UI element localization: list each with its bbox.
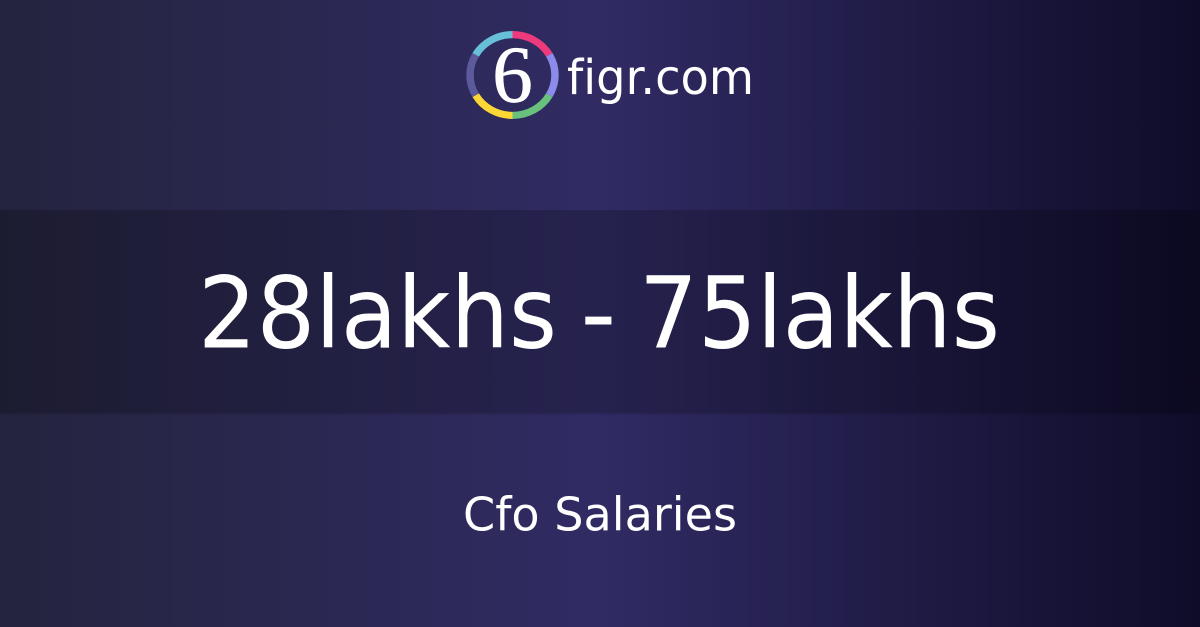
logo wordmark: figr.com <box>567 50 754 106</box>
subtitle: Cfo Salaries <box>463 488 737 542</box>
salary range headline: 75lakhs <box>639 256 1000 372</box>
icon: segmented ring <box>470 35 555 115</box>
band fill <box>0 210 1200 413</box>
salary range headline: 28lakhs <box>198 256 557 372</box>
icon: numeral six: 6 <box>492 30 533 120</box>
highlighted band <box>0 210 1200 415</box>
logo <box>470 30 754 120</box>
salary range headline: - <box>580 256 616 372</box>
band shadow <box>0 413 1200 415</box>
salary range headline <box>198 256 1000 372</box>
